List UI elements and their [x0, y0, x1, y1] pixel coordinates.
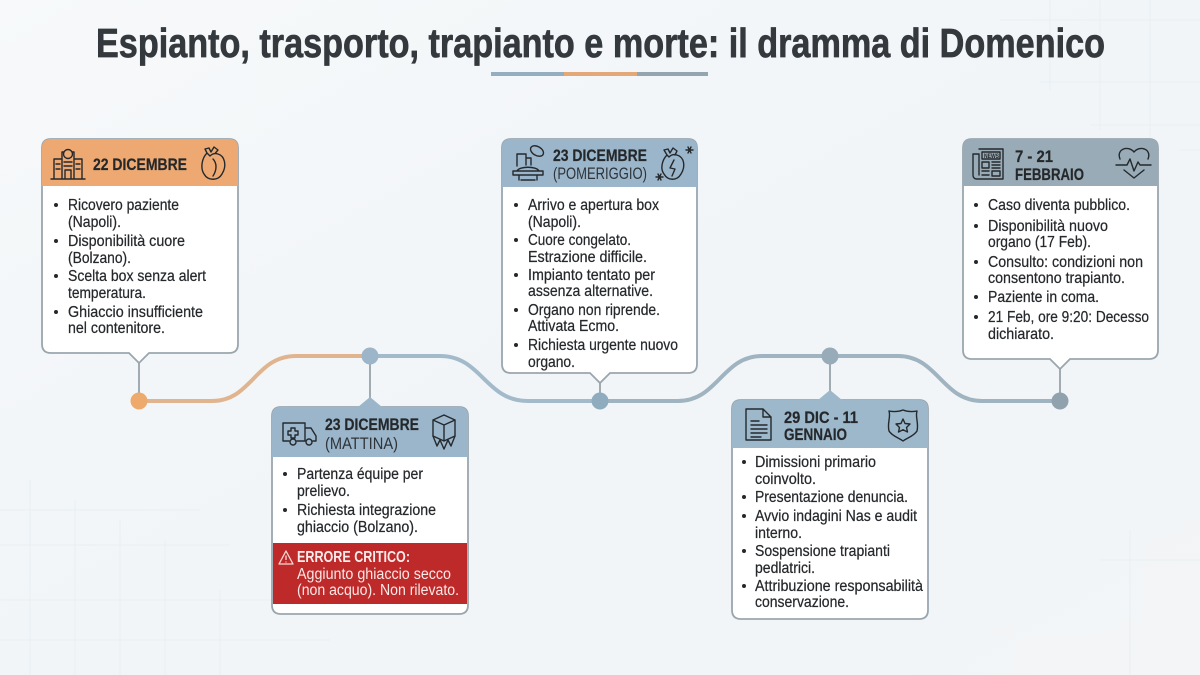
callout: errore critico: Aggiunto ghiaccio secco — [297, 566, 451, 583]
icon: ambulance — [283, 423, 316, 445]
panel: 22 dicembre — [42, 139, 238, 363]
bullet list: Estrazione difficile. — [528, 249, 647, 266]
panel: 23 dicembre pomeriggio — [502, 139, 697, 383]
orange timeline segment — [139, 356, 370, 401]
bullet list — [283, 466, 436, 536]
bullet list: Attribuzione responsabilità — [755, 578, 923, 595]
heading: 7 - 21 — [1015, 147, 1053, 166]
bullet list: ghiaccio (Bolzano). — [297, 519, 418, 536]
bullet list: (Napoli). — [528, 214, 581, 231]
bullet list: (Bolzano). — [68, 250, 131, 267]
bullet list: Dimissioni primario — [755, 454, 876, 471]
subheading: (POMERIGGIO) — [553, 164, 647, 183]
bullet list: Partenza équipe per — [297, 466, 423, 483]
bullet list: consentono trapianto. — [988, 270, 1125, 287]
bullet list: Disponibilità cuore — [68, 233, 185, 250]
heading second line: GENNAIO — [784, 425, 847, 444]
panel: 29 dic - 11 gennaio — [732, 390, 928, 619]
bullet list: pedlatrici. — [755, 560, 815, 577]
bullet list: nel contenitore. — [68, 320, 165, 337]
bullet list: Avvio indagini Nas e audit — [755, 508, 918, 525]
bullet list: Caso diventa pubblico. — [988, 197, 1130, 214]
bullet list: coinvolto. — [755, 471, 816, 488]
bullet list: Paziente in coma. — [988, 289, 1099, 306]
bullet list — [54, 197, 207, 337]
bullet list: prelievo. — [297, 483, 350, 500]
heading: 23 DICEMBRE — [325, 415, 419, 434]
header band — [963, 139, 1158, 186]
bullet list: temperatura. — [68, 285, 146, 302]
bullet list: interno. — [755, 525, 802, 542]
icon: hospital — [51, 150, 85, 179]
panel: 23 dicembre mattina — [272, 397, 468, 614]
bullet list: Sospensione trapianti — [755, 543, 890, 560]
timeline nodes — [130, 348, 1068, 410]
bullet list — [514, 197, 678, 371]
bullet list: Arrivo e apertura box — [528, 197, 659, 214]
header band — [502, 139, 697, 187]
panel: 7 - 21 febbraio — [963, 139, 1158, 369]
subheading: (MATTINA) — [325, 434, 398, 453]
icon: frozen heart — [656, 147, 693, 180]
icon: police badge — [888, 410, 918, 441]
icon: operating table — [513, 144, 545, 180]
bullet list — [974, 197, 1149, 343]
connectors — [139, 356, 1060, 401]
header band — [272, 397, 468, 457]
bullet list: organo (17 Feb). — [988, 234, 1091, 251]
bullet list: Richiesta integrazione — [297, 502, 436, 519]
title underline — [491, 72, 708, 76]
timeline — [139, 356, 1060, 401]
callout: errore critico: ERRORE CRITICO: — [297, 549, 410, 566]
bullet list: Attivata Ecmo. — [528, 318, 619, 335]
icon: warning — [279, 551, 293, 564]
bullet list — [742, 454, 923, 611]
icon: newspaper: NEWS — [984, 153, 1000, 160]
blue timeline segment — [370, 356, 600, 401]
bullet list: Disponibilità nuovo — [988, 218, 1108, 235]
bullet list: Organo non riprende. — [528, 302, 660, 319]
header band — [42, 139, 238, 186]
icon: document — [746, 409, 771, 440]
bullet list: Consulto: condizioni non — [988, 254, 1143, 271]
icon: heart — [202, 147, 225, 179]
heading: 29 DIC - 11 — [784, 408, 858, 427]
icon: ice cube — [433, 415, 455, 449]
bullet list: 21 Feb, ore 9:20: Decesso — [988, 309, 1149, 326]
callout: errore critico: (non acquo). Non rilevato. — [297, 582, 459, 599]
grey-blue timeline segment — [600, 356, 1060, 401]
bullet list: Richiesta urgente nuovo — [528, 337, 678, 354]
icon: heartbeat — [1116, 148, 1151, 178]
heading: 22 DICEMBRE — [93, 155, 187, 174]
bullet list: assenza alternative. — [528, 283, 653, 300]
header band — [732, 390, 928, 448]
bullet list: Impianto tentato per — [528, 267, 655, 284]
bullet list: dichiarato. — [988, 326, 1054, 343]
heading: 23 DICEMBRE — [553, 146, 647, 165]
bullet list: Ghiaccio insufficiente — [68, 304, 203, 321]
callout: errore critico — [273, 543, 467, 604]
bullet list: Cuore congelato. — [528, 232, 631, 249]
heading second line: FEBBRAIO — [1015, 165, 1084, 184]
bullet list: (Napoli). — [68, 214, 121, 231]
bullet list: Ricovero paziente — [68, 197, 179, 214]
bullet list: conservazione. — [755, 594, 849, 611]
bullet list: organo. — [528, 354, 575, 371]
bullet list: Presentazione denuncia. — [755, 489, 908, 506]
icon: newspaper — [973, 149, 1003, 179]
bullet list: Scelta box senza alert — [68, 268, 207, 285]
